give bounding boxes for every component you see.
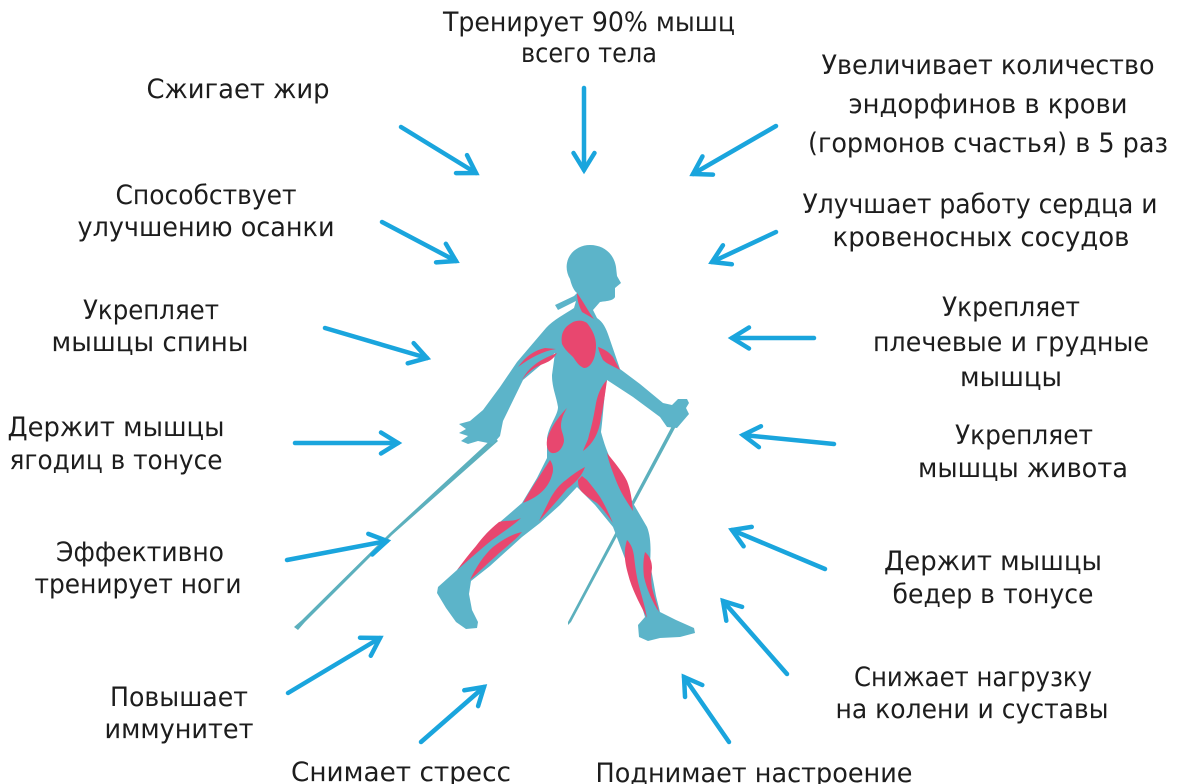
arrow: shoulders xyxy=(732,336,814,340)
text: shoulder and chest muscles: мышцы xyxy=(960,362,1062,393)
text: immunity xyxy=(104,682,254,745)
walking pole: rear xyxy=(294,437,498,630)
muscle: rear thigh xyxy=(523,460,553,503)
arrow: legs xyxy=(287,541,387,560)
text: shoulder and chest muscles xyxy=(873,292,1149,393)
text: immunity: иммунитет xyxy=(104,714,254,745)
text: legs: тренирует ноги xyxy=(34,569,242,600)
arrow: posture xyxy=(382,222,456,261)
arrow: heart xyxy=(712,232,776,262)
text: shoulder and chest muscles: Укрепляет xyxy=(942,292,1080,323)
muscle: rear calf xyxy=(457,518,522,580)
muscle: inner thigh rear leg xyxy=(539,467,585,521)
text: legs xyxy=(34,537,242,600)
text: abdominals xyxy=(918,420,1128,484)
text: knees and joints: на колени и суставы xyxy=(836,694,1108,725)
arrow: mood xyxy=(684,677,729,742)
text: immunity: Повышает xyxy=(110,682,248,713)
arrow: stress xyxy=(421,687,484,742)
text: heart and vessels: кровеносных сосудов xyxy=(832,222,1130,253)
arrow: endorphins xyxy=(693,126,776,174)
text: endorphins: (гормонов счастья) в 5 раз xyxy=(808,128,1168,159)
text: trains 90% of muscles xyxy=(442,7,735,69)
text: trains 90% of muscles: всего тела xyxy=(521,38,657,69)
text: thighs: бедер в тонусе xyxy=(892,579,1094,610)
text: knees and joints xyxy=(836,662,1108,725)
text: abdominals: Укрепляет xyxy=(955,420,1093,451)
text: posture: улучшению осанки xyxy=(78,212,334,243)
text: glutes: Держит мышцы xyxy=(8,412,224,443)
text: glutes: ягодиц в тонусе xyxy=(10,445,222,476)
arrow: thighs xyxy=(732,530,825,569)
arrow: abdominals xyxy=(743,435,834,444)
text: posture: Способствует xyxy=(116,180,296,211)
figure: Nordic walker with highlighted muscles xyxy=(294,245,695,641)
text: posture xyxy=(78,180,334,243)
text: back muscles: мышцы спины xyxy=(52,327,248,358)
muscle: hamstring front leg xyxy=(578,476,613,523)
arrow: top xyxy=(582,88,586,170)
arrow: burns fat xyxy=(401,127,476,173)
arrow: glutes xyxy=(295,441,398,445)
text: legs: Эффективно xyxy=(56,537,224,568)
text: back muscles: Укрепляет xyxy=(83,295,219,326)
muscle: abdomen side xyxy=(583,380,607,451)
text: thighs: Держит мышцы xyxy=(884,546,1102,577)
text: endorphins xyxy=(808,50,1168,159)
muscle: glute xyxy=(547,408,567,453)
text: heart and vessels: Улучшает работу сердца и xyxy=(802,189,1158,220)
text: back muscles xyxy=(52,295,248,358)
muscle: front calf xyxy=(625,540,659,618)
arrow: immunity xyxy=(288,638,380,693)
text: heart and vessels xyxy=(802,189,1158,253)
text: burns fat: Сжигает жир xyxy=(146,74,330,105)
muscle: front arm xyxy=(598,347,620,370)
text: endorphins: эндорфинов в крови xyxy=(848,89,1128,120)
body silhouette xyxy=(437,245,695,641)
text: glutes xyxy=(8,412,224,476)
muscle: upper arm rear xyxy=(518,348,557,380)
text: knees and joints: Снижает нагрузку xyxy=(854,662,1092,693)
muscle: chest and shoulder xyxy=(562,321,596,368)
text: endorphins: Увеличивает количество xyxy=(822,50,1154,81)
walking pole: front xyxy=(568,408,684,625)
arrow: knees xyxy=(723,601,787,674)
arrow: back xyxy=(325,328,427,358)
muscle: front thigh front leg xyxy=(607,453,633,511)
text: shoulder and chest muscles: плечевые и грудные xyxy=(873,327,1149,358)
muscle: neck xyxy=(577,293,594,319)
text: abdominals: мышцы живота xyxy=(918,453,1128,484)
text: thighs xyxy=(884,546,1102,610)
text: trains 90% of muscles: Тренирует 90% мышц xyxy=(442,7,735,38)
